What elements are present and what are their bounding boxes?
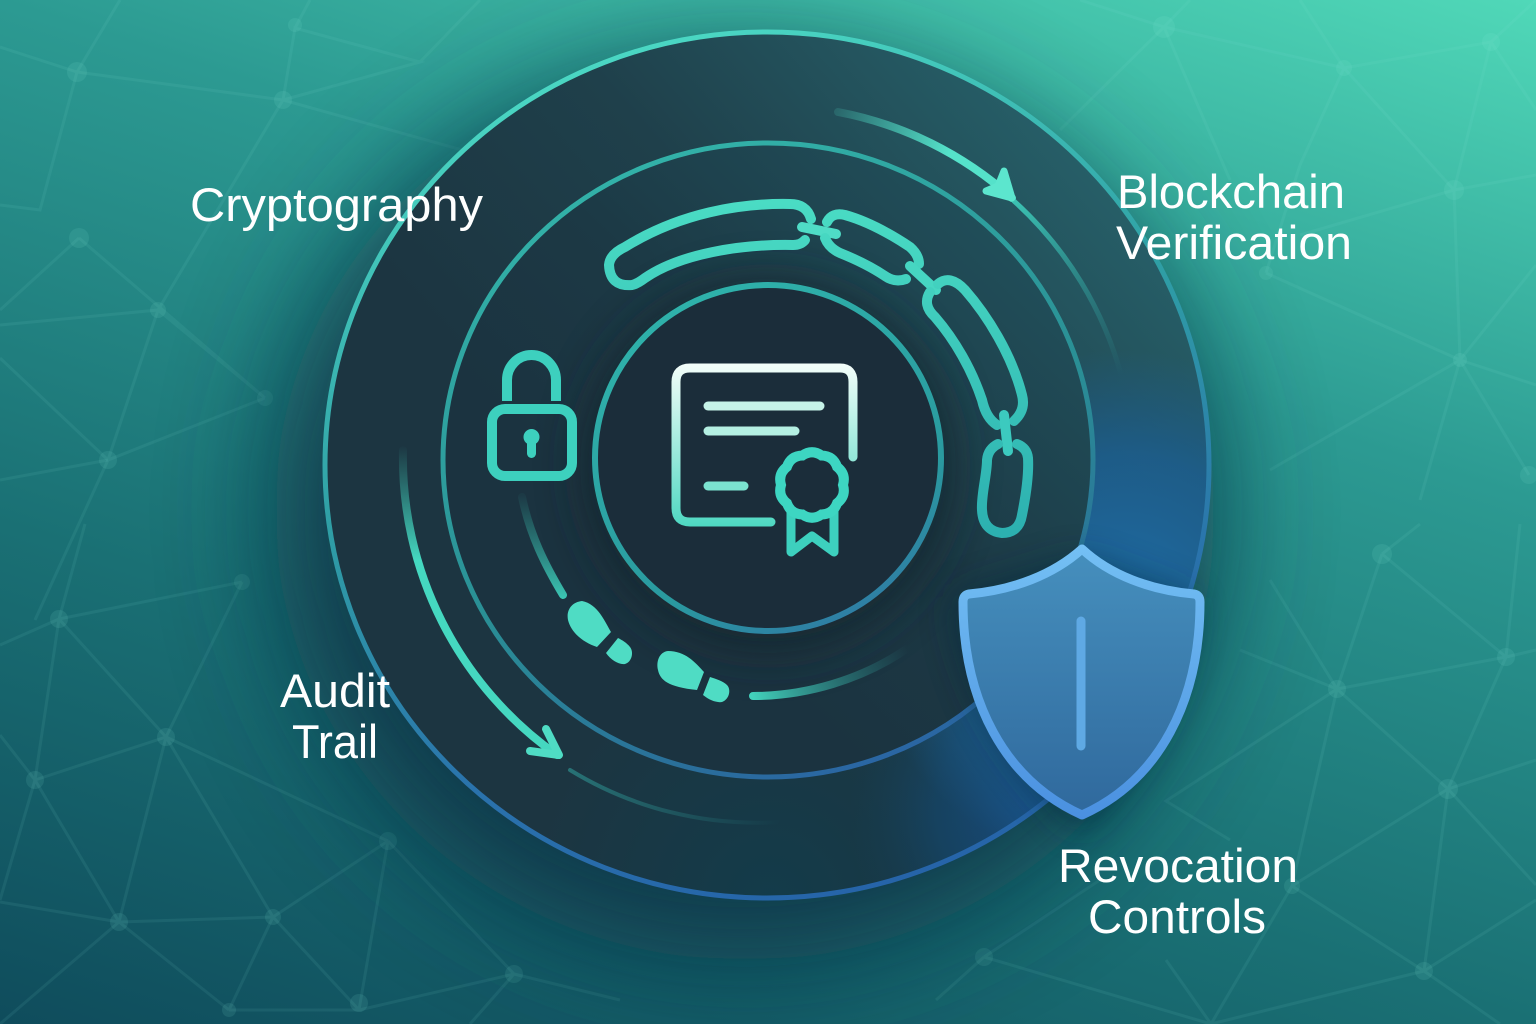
label: Blockchain Verification — [1116, 165, 1352, 269]
icon: shield — [955, 549, 1200, 830]
audit trail arc lower — [753, 648, 908, 696]
label: Cryptography: Cryptography — [190, 178, 484, 231]
link 1 — [609, 204, 811, 285]
connector 1 — [802, 227, 836, 234]
certificate ribbon — [791, 510, 834, 552]
certificate outline — [676, 368, 853, 522]
icon: padlock — [492, 355, 572, 476]
label: Audit Trail — [280, 664, 390, 768]
blue glow behind shield — [746, 370, 1206, 896]
shield center bar — [1076, 621, 1086, 746]
outer ring disc — [328, 34, 1206, 894]
label: Audit Trail: Audit — [280, 664, 390, 717]
shield glow — [955, 560, 1190, 830]
link 2 — [825, 214, 919, 280]
shield body — [963, 549, 1200, 815]
footprint 2 sole — [657, 651, 704, 690]
link 3 — [927, 280, 1023, 425]
audit trail arc upper — [522, 497, 563, 595]
icon: certificate — [676, 368, 853, 552]
footprint 1 heel — [606, 638, 632, 664]
label: Revocation Controls — [1058, 839, 1298, 943]
label: Blockchain Verification: Blockchain — [1117, 165, 1345, 218]
certificate text lines — [708, 406, 820, 486]
padlock shackle — [507, 355, 556, 401]
inner disc shadow — [580, 278, 956, 654]
footprint 2 heel — [703, 677, 729, 702]
disc drop shadow — [275, 60, 1215, 960]
outer ring stroke — [325, 32, 1209, 898]
footprint 1 sole — [568, 601, 611, 647]
padlock body — [492, 409, 572, 476]
link 4 — [982, 444, 1028, 533]
inner circle — [595, 285, 941, 631]
connector 3 — [1004, 415, 1008, 451]
certificate seal — [780, 452, 844, 518]
label: Revocation Controls: Revocation — [1058, 839, 1298, 892]
label: Revocation Controls: Controls — [1088, 890, 1266, 943]
icon: footprints — [568, 601, 729, 702]
connector 2 — [910, 266, 936, 290]
icon: chain — [609, 204, 1028, 533]
arrow: top right — [838, 112, 1122, 378]
middle ring disc — [443, 143, 1093, 777]
keyhole — [524, 429, 540, 458]
arrow: bottom left — [403, 450, 780, 823]
label: Blockchain Verification: Verification — [1116, 216, 1352, 269]
label: Audit Trail: Trail — [292, 715, 378, 768]
